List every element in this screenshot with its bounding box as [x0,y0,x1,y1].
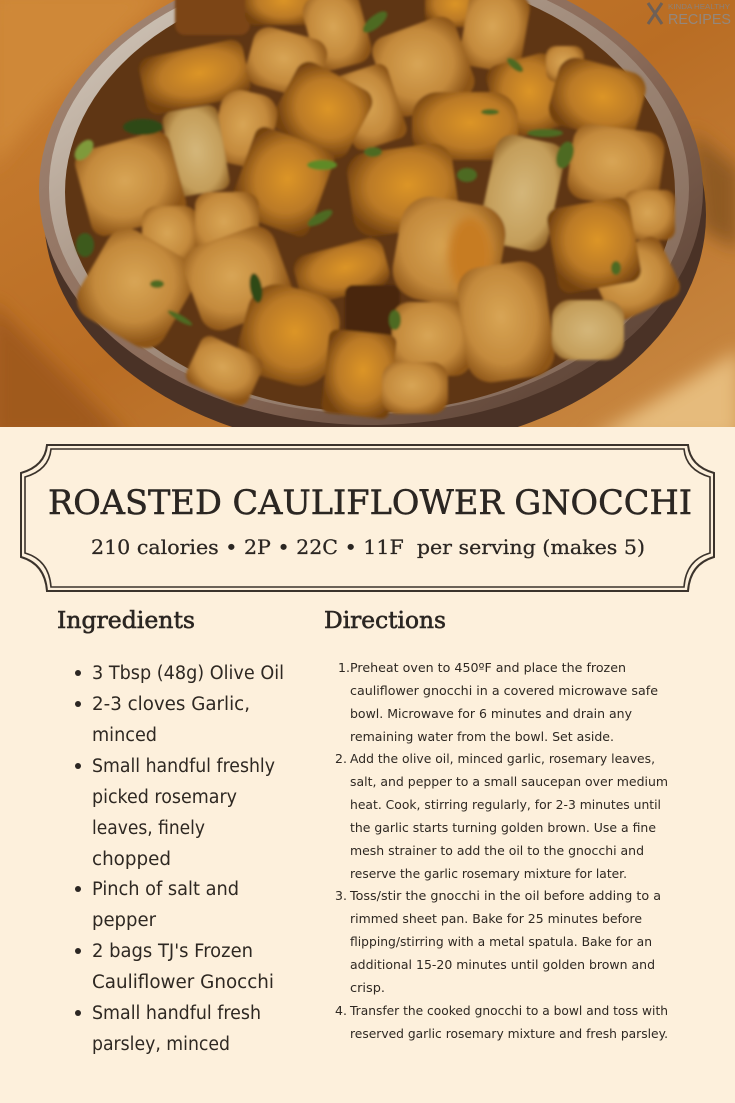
herb flecks [71,8,621,330]
directions list: 1. [338,660,350,675]
directions list: remaining water from the bowl. Set aside. [350,729,614,744]
directions list: 2. [335,751,347,766]
photo: roasted gnocchi in a bowl [0,0,735,450]
directions list: the garlic starts turning golden brown. Use a fine [350,820,656,835]
directions list: heat. Cook, stirring regularly, for 2-3 minutes until [350,797,661,812]
directions list: reserve the garlic rosemary mixture for later. [350,866,627,881]
directions list: cauliflower gnocchi in a covered microwave safe [350,683,658,698]
directions list: mesh strainer to add the oil to the gnocchi and [350,843,644,858]
directions list: crisp. [350,980,385,995]
ingredients list: 3 Tbsp (48g) Olive Oil [92,663,284,684]
ingredients list: Cauliflower Gnocchi [92,972,274,993]
directions list: Preheat oven to 450ºF and place the frozen [350,660,626,675]
directions list: reserved garlic rosemary mixture and fresh parsley. [350,1026,668,1041]
directions list: bowl. Microwave for 6 minutes and drain any [350,706,633,721]
nutrition subtitle: 210 calories • 2P • 22C • 11F per serving (makes 5) [91,535,645,559]
ingredients list: Small handful freshly [92,756,275,777]
logo: Kinda Healthy Recipes [648,3,731,28]
ingredients list: picked rosemary [92,787,237,808]
gnocchi pieces [69,0,684,419]
ingredients list [75,663,284,1055]
ingredients list: minced [92,725,157,746]
directions list: Transfer the cooked gnocchi to a bowl and toss with [349,1003,668,1018]
ingredients list: Small handful fresh [92,1003,261,1024]
ingredients list: 2 bags TJ's Frozen [92,941,253,962]
logo: Kinda Healthy Recipes: KINDA HEALTHY [668,4,730,11]
directions list: 4. [335,1003,347,1018]
logo: Kinda Healthy Recipes: RECIPES [668,11,731,28]
ingredients list: 2-3 cloves Garlic, [92,694,250,715]
directions list: additional 15-20 minutes until golden brown and [350,957,655,972]
ingredients list: leaves, finely [92,818,205,839]
bowl [39,0,706,450]
title frame [21,445,714,591]
directions list: rimmed sheet pan. Bake for 25 minutes before [350,911,642,926]
heading: ingredients: Ingredients [57,608,195,634]
heading: directions: Directions [324,608,446,634]
ingredients list: chopped [92,849,171,870]
directions list: 3. [335,888,347,903]
directions list [335,660,668,1041]
directions list: Toss/stir the gnocchi in the oil before adding to a [349,888,661,903]
ingredients list: Pinch of salt and [92,879,239,900]
title: ROASTED CAULIFLOWER GNOCCHI [48,483,692,523]
directions list: Add the olive oil, minced garlic, rosemary leaves, [350,751,655,766]
directions list: salt, and pepper to a small saucepan over medium [350,774,668,789]
directions list: flipping/stirring with a metal spatula. Bake for an [350,934,652,949]
ingredients list: parsley, minced [92,1034,230,1055]
ingredients list: pepper [92,910,156,931]
